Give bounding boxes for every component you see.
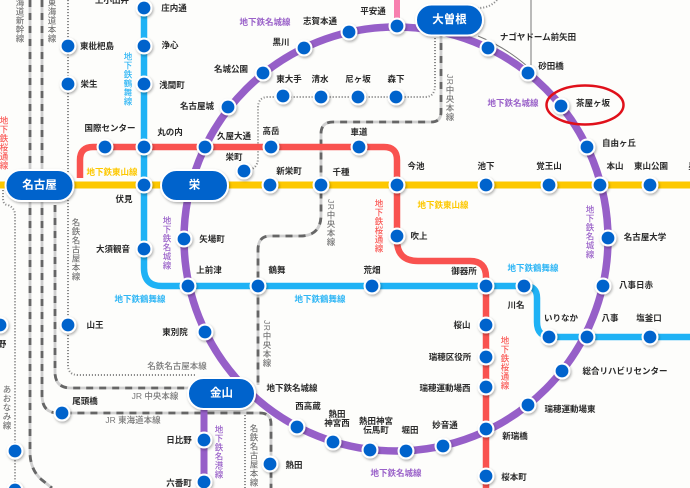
station: 黒川 [272,37,312,56]
station: 御器所: 御器所 [451,266,477,276]
line: 鶴舞線 blue [144,0,690,337]
station: 川名: 川名 [507,300,525,310]
station: 名古屋城 [180,98,236,116]
station: 塩釜口 [636,313,662,346]
line label: 名鉄名古屋本線 left: 名鉄名古屋本線 [71,217,81,281]
station: 八事 [578,313,619,346]
station: 八事日赤 [594,278,653,294]
station: 矢場町: 矢場町 [199,234,225,244]
station: 新栄町: 新栄町 [276,166,302,176]
station: ナゴヤドーム前矢田 [480,32,576,56]
line label: 地下鉄名城線 bottom right: 地下鉄名城線 [370,468,422,478]
station: 東枇杷島: 東枇杷島 [80,41,114,51]
station: 山王 [60,316,104,334]
station: 瑞穂運動場西 [419,378,494,396]
station: 平安通: 平安通 [360,6,386,16]
station: 森下: 森下 [387,74,405,84]
station: 桜山: 桜山 [453,320,471,330]
station: 吹上: 吹上 [410,231,428,241]
station: 茶屋ヶ坂: 茶屋ヶ坂 [576,98,610,108]
station: 車道: 車道 [350,127,368,137]
station: あおなみ線 lower [6,482,24,488]
station: 川名 [507,278,532,310]
interchange: 名古屋: 名古屋 [22,178,57,192]
station: 本山 [592,161,624,194]
station: 茶屋ヶ坂 [552,98,610,114]
station: 八事日赤: 八事日赤 [619,280,653,290]
station: 尾頭橋 [54,396,98,422]
station: 清水: 清水 [311,74,329,84]
line label: JR 東海道本線: JR 東海道本線 [105,415,161,425]
line label: 地下鉄桜通線 lower: 地下鉄桜通線 [500,335,510,390]
station: 栄町 [225,152,252,180]
line label: 地下鉄名城線 right vertical: 地下鉄名城線 [585,204,595,259]
station: 鶴舞: 鶴舞 [268,265,286,275]
station: 覚王山: 覚王山 [536,161,562,171]
line label: JR 中央本線 horizontal: JR 中央本線 [132,391,179,401]
line label: JR中央本線 center: JR中央本線 [326,199,336,247]
station: 東別院: 東別院 [162,327,188,337]
line label: 地下鉄鶴舞線 center: 地下鉄鶴舞線 [294,294,346,304]
station: 妙音通 [432,420,458,454]
station: 今池 [388,161,425,194]
interchange: 大曽根: 大曽根 [432,12,467,26]
station: 日比野 [166,432,212,448]
station: 東山公園 [634,161,668,194]
station: 尼ヶ坂 [345,74,371,106]
station: 大須観音: 大須観音 [96,244,130,254]
station: 浅間町: 浅間町 [159,80,185,90]
line label: 地下鉄名城線 near 金山: 地下鉄名城線 [266,383,318,393]
station: 六番町: 六番町 [166,478,192,488]
station: 瑞穂区役所: 瑞穂区役所 [429,352,472,362]
station: いりなか: いりなか [544,313,578,323]
interchange: 栄: 栄 [189,178,201,192]
line: 桜通線 red [80,147,486,488]
line label: 地下鉄鶴舞線 right: 地下鉄鶴舞線 [507,263,559,273]
station: 東枇杷島 [60,38,114,54]
line label: 地下鉄名城線 right top: 地下鉄名城線 [487,98,539,108]
station: 鶴舞 [250,265,286,294]
station: あおなみ線 upper [6,442,24,460]
station: ナゴヤドーム前矢田: ナゴヤドーム前矢田 [500,32,576,42]
station: 瑞穂運動場東: 瑞穂運動場東 [544,404,596,414]
station: 千種 [312,167,350,194]
station: 矢場町 [176,230,225,248]
station: 尼ヶ坂: 尼ヶ坂 [345,74,371,84]
station: 栄生 [60,76,98,92]
station: 久屋大通 [196,131,251,156]
station: 吹上 [388,228,428,244]
station: 砂田橋: 砂田橋 [538,61,564,71]
line label: 名鉄名古屋本線 bottom: 名鉄名古屋本線 [249,423,259,487]
station: 自由ヶ丘 [578,138,636,156]
station: 熱田神宮伝馬町: 熱田神宮 [359,416,393,426]
station: 本山: 本山 [606,161,624,171]
station: 浅間町 [136,76,185,92]
station: 桜山 [453,316,494,334]
station: 上前津 [180,265,222,294]
station: 新栄町 [262,166,302,194]
line label: 地下鉄名城線 top: 地下鉄名城線 [239,17,291,27]
station: 荒畑: 荒畑 [363,265,381,275]
station: 熱田神宮西: 神宮西 [324,418,350,428]
station: 伏見: 伏見 [115,194,133,204]
station: 新瑞橋 [478,420,528,441]
station: 熱田神宮伝馬町: 伝馬町 [363,425,389,435]
railway lines: JR and Meitetsu [3,0,531,488]
station: 熱田神宮西 [324,409,350,450]
station: 瑞穂運動場西: 瑞穂運動場西 [419,383,471,393]
station: 熱田 [262,456,303,472]
station: 総合リハビリセンター [554,362,668,380]
station: 高岳 [262,126,280,156]
station: 久屋大通: 久屋大通 [217,131,251,141]
station: 名城公園 [214,64,272,82]
station: 堀田: 堀田 [401,425,419,435]
station: 名古屋城: 名古屋城 [180,101,214,111]
station: 覚王山 [536,161,562,194]
station: 高岳: 高岳 [262,126,280,136]
station: 瑞穂区役所 [429,348,494,366]
line label: 地下鉄桜通線 center: 地下鉄桜通線 [374,198,384,253]
line label: JR中央本線 top: JR中央本線 [445,74,455,122]
line label: 地下鉄鶴舞線 vertical: 地下鉄鶴舞線 [123,51,133,106]
station: 栄生: 栄生 [80,79,98,89]
line: 名港線 purple [200,392,208,488]
station: 東大手: 東大手 [276,74,302,84]
line label: 地下鉄名城線 left vertical: 地下鉄名城線 [162,215,172,270]
station: 名城公園: 名城公園 [214,64,248,74]
station: 平安通 [360,6,406,34]
station: 清水 [311,74,330,106]
station: 熱田神宮伝馬町 [359,416,393,458]
station: 伏見 [115,176,152,204]
highlight ring: 茶屋ヶ坂 [546,86,624,124]
station: 名古屋大学: 名古屋大学 [624,232,667,242]
interchange: 栄 [161,170,228,201]
line label: 地下鉄鶴舞線 left: 地下鉄鶴舞線 [114,294,166,304]
station: 瑞穂運動場東 [520,396,596,414]
interchange: 大曽根 [416,4,483,36]
station: 国際センター [84,123,136,156]
station: 熱田: 熱田 [285,460,303,470]
station: 自由ヶ丘: 自由ヶ丘 [602,138,636,148]
station: 森下 [387,74,405,106]
station: 桜本町 [478,468,527,484]
line label: あおなみ線: あおなみ線 [2,385,12,430]
line label: 名鉄名古屋本線 horizontal: 名鉄名古屋本線 [147,361,207,371]
station: 山王: 山王 [86,320,104,330]
line label: 地下鉄名港線: 地下鉄名港線 [214,424,224,479]
station: 国際センター: 国際センター [84,123,136,133]
station: 車道 [350,127,368,156]
station: いりなか [540,313,578,346]
station: 池下 [477,161,495,194]
station: 新瑞橋: 新瑞橋 [502,431,528,441]
station: 御器所 [451,266,494,294]
station: 日比野: 日比野 [166,435,192,445]
station: 東山公園: 東山公園 [634,161,668,171]
station: 今池: 今池 [407,161,425,171]
line: 東山線 yellow [0,182,690,188]
interchange: 金山: 金山 [210,386,233,400]
station: 砂田橋 [520,61,564,82]
station: 浄心: 浄心 [161,40,179,50]
station: 丸の内: 丸の内 [157,127,183,137]
interchange: 金山 [188,378,255,409]
line: 上飯田線 pink [394,0,400,26]
station: 桜本町: 桜本町 [501,472,527,482]
station: 妙音通: 妙音通 [432,420,458,430]
station: 志賀本通 [303,16,358,40]
station: 丸の内 [136,127,183,156]
line label: 地下鉄東山線 left: 地下鉄東山線 [86,167,138,177]
station: 西高蔵: 西高蔵 [295,401,321,411]
station: 総合リハビリセンター: 総合リハビリセンター [582,366,668,376]
station: 黒川: 黒川 [272,37,290,47]
station: 荒畑 [363,265,381,294]
station: 大須観音 [96,240,152,258]
station: 熱田神宮西: 熱田 [328,409,346,419]
station: 塩釜口: 塩釜口 [636,313,662,323]
station: 浄心 [136,38,179,54]
station: 名古屋大学 [600,230,667,246]
station: 池下: 池下 [477,161,495,171]
station: 栄町: 栄町 [225,152,243,162]
station: 尾頭橋: 尾頭橋 [72,396,98,406]
station: 八事: 八事 [601,313,619,323]
station: 六番町 [166,474,212,488]
line label: JR中央本線 lower: JR中央本線 [262,320,272,368]
station: 庄内通 [136,0,187,16]
station: 東別院 [162,324,214,340]
station: 左端 partial [0,316,8,334]
line label: 地下鉄東山線 center: 地下鉄東山線 [417,200,469,210]
station: 庄内通: 庄内通 [161,3,187,13]
station: 西高蔵 [288,401,321,436]
station: 堀田 [398,425,419,460]
station: 東大手 [274,74,302,104]
station: 上前津: 上前津 [196,265,222,275]
interchange: 名古屋 [6,170,74,201]
station: 志賀本通: 志賀本通 [303,16,337,26]
line: 名城線 purple loop [184,27,608,451]
station: 千種: 千種 [332,167,350,177]
